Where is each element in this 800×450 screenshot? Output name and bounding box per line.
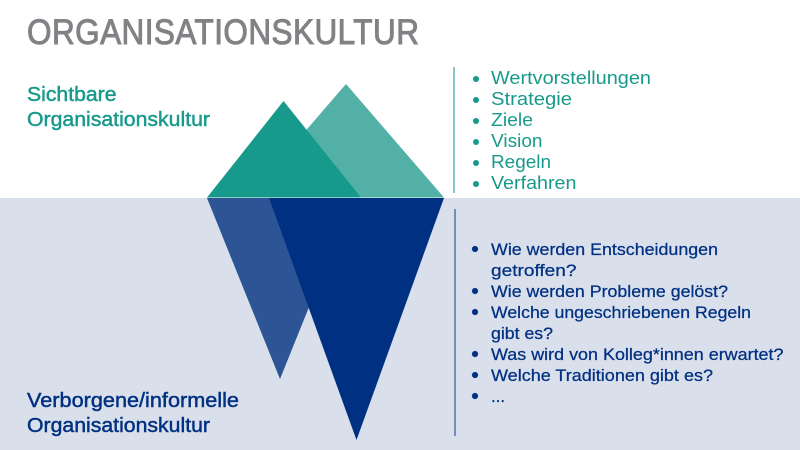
- list: visible culture items: Verfahren: [491, 172, 576, 193]
- list: hidden culture questions: Welche ungeschriebenen Regeln: [491, 303, 751, 322]
- list: visible culture items: Ziele: [491, 109, 533, 130]
- heading: visible culture: Sichtbare: [27, 84, 116, 106]
- list: hidden culture questions: Wie werden Entscheidungen: [491, 240, 718, 259]
- title: ORGANISATIONSKULTUR: [27, 14, 419, 52]
- list: hidden culture questions: Wie werden Probleme gelöst?: [491, 282, 728, 301]
- heading: visible culture: Organisationskultur: [27, 109, 210, 131]
- iceberg base: front shard: [269, 198, 444, 440]
- iceberg tip: back peak: [248, 84, 444, 198]
- heading: visible culture: [27, 84, 210, 131]
- list: hidden culture questions: gibt es?: [491, 324, 553, 343]
- list: visible culture items: Vision: [491, 130, 542, 151]
- list: visible culture items: Regeln: [491, 151, 551, 172]
- list: hidden culture questions: Welche Traditionen gibt es?: [491, 366, 713, 385]
- panel: water background: [0, 198, 800, 450]
- heading: hidden culture: [27, 390, 239, 437]
- heading: hidden culture: Organisationskultur: [27, 415, 210, 437]
- list: hidden culture questions: getroffen?: [491, 261, 576, 280]
- icon: iceberg: [207, 84, 444, 440]
- list: hidden culture questions: ...: [491, 387, 505, 406]
- iceberg base: back shard: [207, 198, 353, 379]
- list: visible culture items: Wertvorstellungen: [491, 67, 651, 88]
- iceberg tip: front peak: [207, 101, 361, 198]
- list: visible culture items: [473, 67, 651, 193]
- list: hidden culture questions: [472, 240, 784, 406]
- heading: hidden culture: Verborgene/informelle: [27, 390, 239, 412]
- list: visible culture items: Strategie: [491, 88, 572, 109]
- divider: hidden list: [454, 209, 456, 436]
- list: hidden culture questions: Was wird von Kolleg*innen erwartet?: [491, 345, 784, 364]
- divider: visible list: [453, 67, 455, 193]
